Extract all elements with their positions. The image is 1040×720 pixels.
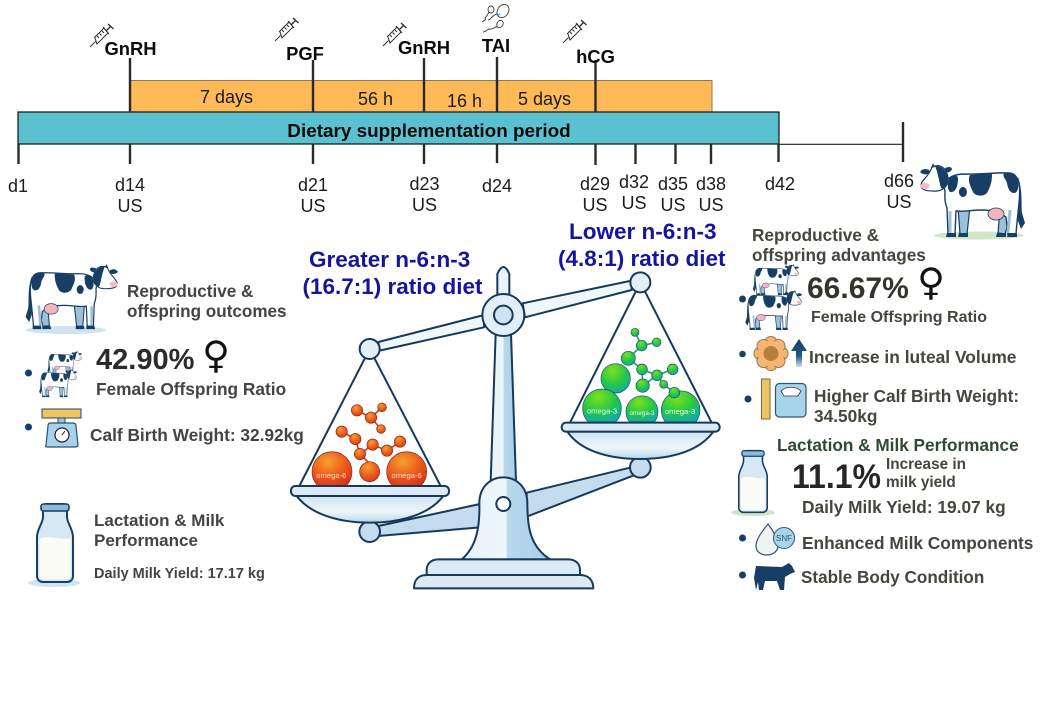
omega-6 molecules: omega-6 [316,471,346,480]
panel: right advantages [731,225,1033,590]
dietary supplementation bar: Dietary supplementation period [287,121,571,142]
pivot [482,294,524,336]
stat: milk components: SNF [776,534,792,543]
protocol bar [130,80,712,112]
stat: daily milk yield left: Daily Milk Yield: 17.17 kg [94,566,265,582]
stat: female offspring ratio right: ♀ [917,260,945,304]
day labels: d24 [482,176,512,196]
day labels: d38 [696,174,726,194]
icon: milk bottle left [28,504,80,587]
icon: milk bottle right [731,451,775,516]
icon: syringes [90,18,586,47]
heading: reproductive advantages [752,225,926,265]
omega-3 molecules [583,328,700,422]
day labels: US [660,195,686,215]
stat: milk components [739,524,1033,555]
day labels: US [300,196,326,216]
day labels: US [412,195,437,215]
day labels [8,171,914,216]
stat: female offspring ratio right: 66.67% [807,272,909,305]
day labels: d66 [884,171,914,191]
day labels: d23 [409,174,440,194]
heading: greater ratio diet: Greater n-6:n-3 [309,247,470,272]
interval labels: 7 days [200,87,253,107]
left pan [291,349,449,523]
stat: female offspring ratio right: Female Offspring Ratio [811,309,987,326]
stat: daily milk yield right: Daily Milk Yield: 19.07 kg [802,497,1006,517]
heading: lactation left: Lactation & Milk [94,511,225,530]
stat: calf birth weight: Calf Birth Weight: 32.92kg [90,425,304,445]
hormone labels: GnRH [398,37,450,58]
day labels: US [582,195,608,215]
stat: milk yield increase: Increase in [886,456,966,473]
interval labels: 56 h [358,89,393,109]
heading: reproductive outcomes [127,282,287,321]
heading: reproductive outcomes: offspring outcomes [127,302,287,321]
heading: reproductive advantages: Reproductive & [752,225,879,245]
lower arms [359,457,651,542]
heading: greater ratio diet [302,247,483,299]
day labels: d42 [765,174,795,194]
stat: higher calf birth weight: 34.50kg [814,406,877,426]
interval labels: 5 days [518,89,571,109]
stat: milk yield increase: milk yield [886,474,956,491]
interval labels [200,87,571,111]
omega-3 molecules: omega-3 [587,406,617,415]
heading: lactation right: Lactation & Milk Performance [777,435,1019,455]
day labels: US [886,192,912,212]
omega-3 molecules: omega-3 [665,407,695,416]
icon: cow left [26,264,118,334]
stat: milk yield increase: 11.1% [792,458,881,496]
beam end balls [360,272,650,359]
stat: female offspring ratio right [739,260,987,330]
heading: lower ratio diet: Lower n-6:n-3 [569,219,717,244]
stat: body condition: Stable Body Condition [801,568,984,587]
stat: luteal volume [739,336,1017,370]
omega-3 molecules: omega-3 [630,410,655,417]
day labels: d21 [298,175,328,195]
upper beam [378,281,632,351]
day labels: d35 [658,174,688,194]
hormone labels: GnRH [104,38,157,59]
heading: lower ratio diet: (4.8:1) ratio diet [558,246,726,271]
stat: body condition [739,563,984,590]
right pan [562,282,720,459]
omega-6 molecules [312,403,427,485]
stat: luteal volume: Increase in luteal Volume [809,347,1017,367]
post-supplementation line [779,143,903,145]
ticks [18,57,903,165]
stat: female offspring ratio: Female Offspring Ratio [96,379,286,399]
day labels: US [117,196,143,216]
base hub [462,477,550,559]
heading: greater ratio diet: (16.7:1) ratio diet [302,274,483,299]
day labels: d32 [619,172,649,192]
day labels: US [621,193,647,213]
stat: higher calf birth weight: Higher Calf Birth Weight: [814,386,1019,406]
base plates [414,559,593,588]
finial [497,267,509,297]
heading: lower ratio diet [558,219,726,271]
day labels: d29 [580,174,610,194]
balance scale [291,267,720,588]
hormone labels: hCG [576,46,615,67]
icon: cow top right [920,163,1025,240]
day labels: US [698,195,724,215]
stat: calf birth weight [25,409,304,447]
stat: milk yield increase [792,456,966,496]
heading: reproductive outcomes: Reproductive & [127,282,253,301]
day labels: d1 [8,176,28,196]
heading: lactation left [94,511,225,550]
day labels: d14 [115,175,145,195]
heading: reproductive advantages: offspring advantages [752,245,926,265]
heading: lactation left: Performance [94,531,198,550]
hormone labels: PGF [286,43,324,64]
stat: higher calf birth weight [744,379,1019,426]
interval labels: 16 h [447,91,482,111]
icon: sperm and egg [482,2,512,32]
stat: female offspring ratio [25,333,286,399]
column [491,333,516,482]
timeline [8,2,914,216]
hormone labels [104,35,615,67]
hormone labels: TAI [482,35,510,56]
stat: female offspring ratio: 42.90% [96,344,195,376]
panel: left outcomes [25,264,304,587]
omega-6 molecules: omega-6 [392,471,422,480]
stat: female offspring ratio: ♀ [202,333,230,377]
stat: milk components: Enhanced Milk Components [802,533,1033,553]
dietary supplementation bar [18,112,779,144]
